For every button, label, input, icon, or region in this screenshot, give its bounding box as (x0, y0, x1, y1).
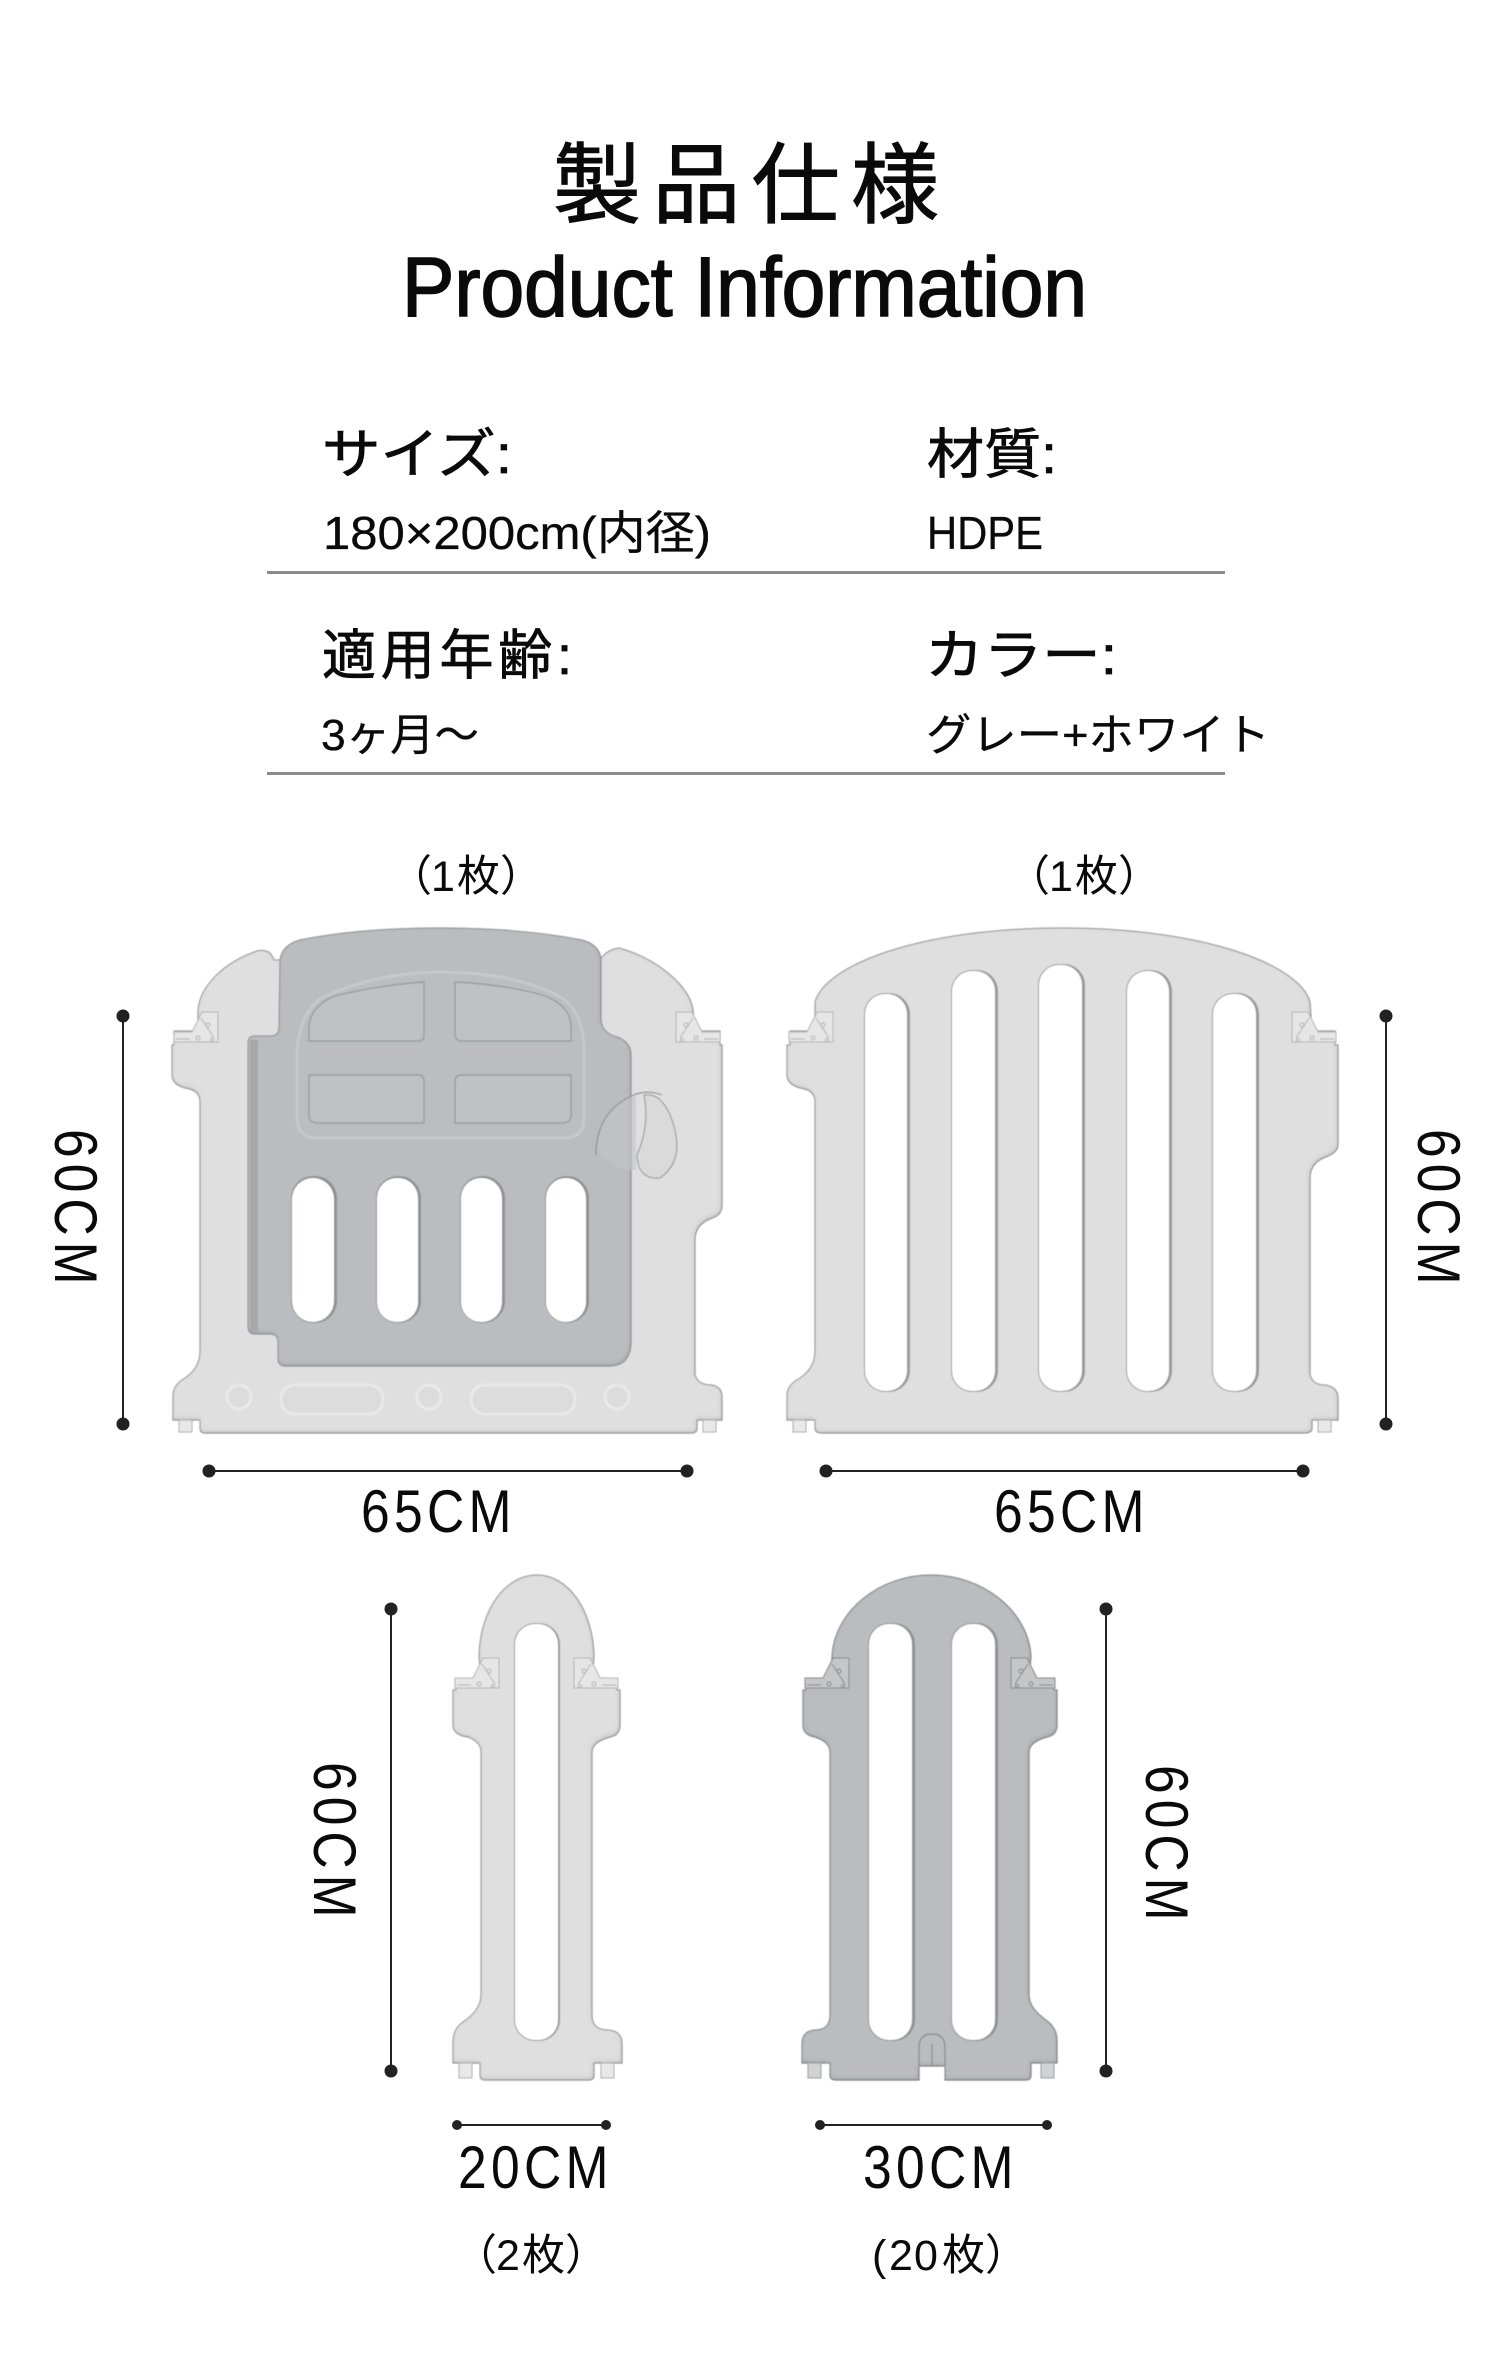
rule 1 (267, 571, 1225, 574)
body (787, 928, 1338, 1433)
label: size: サイズ: (322, 425, 512, 485)
label: material: 材質: (927, 425, 1057, 485)
frame (172, 948, 722, 1433)
gray door (248, 928, 631, 1366)
value: size: 180×200cm(内径) (323, 507, 711, 559)
label: colour: カラー: (925, 626, 1117, 686)
slots (868, 1623, 998, 2041)
label: age: 適用年齢: (322, 626, 572, 686)
handle (596, 1092, 677, 1178)
spec table (267, 425, 1270, 775)
panel: wide panel with five slots (787, 928, 1338, 1433)
dimension: narrow light panel height line (384, 1602, 398, 2078)
bottom indents (227, 1385, 629, 1414)
dimension: wide panel height line (1380, 1010, 1392, 1430)
door slots (291, 1176, 589, 1323)
dimension label: gray panel width: 30CM (863, 2133, 1018, 2201)
quantity label: gray panel: (20枚） (872, 2232, 1028, 2280)
connectors (174, 1012, 720, 1042)
panel: narrow light panel (453, 1575, 622, 2080)
quantity label: narrow light panel: （2枚） (454, 2232, 608, 2280)
dimension label: narrow light panel width: 20CM (458, 2133, 613, 2201)
dimension: wide panel width line (820, 1464, 1310, 1478)
feet (793, 1420, 1331, 1432)
dimension: narrow light panel width line (452, 2120, 611, 2130)
panel: gray panel with two slots (802, 1575, 1057, 2080)
body (453, 1575, 622, 2080)
dimension label: narrow light panel height: 60CM (301, 1762, 369, 1924)
dimension label: door height: 60CM (42, 1129, 110, 1291)
centre notch groove (919, 2034, 945, 2066)
title: 製品仕様: 製品仕様 (553, 136, 939, 235)
dimension: door width line (202, 1464, 694, 1478)
door shadow (250, 1040, 258, 1332)
value: age: 3ヶ月～ (321, 711, 479, 760)
dimension label: gray panel height: 60CM (1133, 1765, 1201, 1927)
window panes (309, 982, 571, 1123)
dimension label: door width: 65CM (361, 1477, 516, 1545)
connectors (805, 1658, 1055, 1688)
dimension label: wide panel height: 60CM (1405, 1129, 1473, 1291)
value: material: HDPE (927, 507, 1043, 559)
panel: door panel (white frame with gray door) (172, 928, 722, 1433)
feet (459, 2063, 614, 2078)
dimension label: wide panel width: 65CM (994, 1477, 1149, 1545)
quantity label: wide panel: （1枚） (1007, 853, 1161, 901)
title: Product Information: Product Information (402, 240, 1087, 334)
slot (514, 1623, 560, 2041)
window frame (297, 972, 584, 1138)
feet (179, 1420, 716, 1432)
rule 2 (267, 772, 1225, 775)
feet (808, 2063, 1054, 2078)
slots (864, 964, 1259, 1392)
quantity label: door panel: （1枚） (389, 853, 543, 901)
connectors (789, 1012, 1336, 1042)
dimension: gray panel width line (815, 2120, 1052, 2130)
dimension: door height line (116, 1010, 130, 1430)
body (802, 1575, 1057, 2080)
value: colour: グレー+ホワイト (926, 711, 1270, 760)
dimension: gray panel height line (1100, 1602, 1112, 2078)
connectors (455, 1658, 618, 1688)
